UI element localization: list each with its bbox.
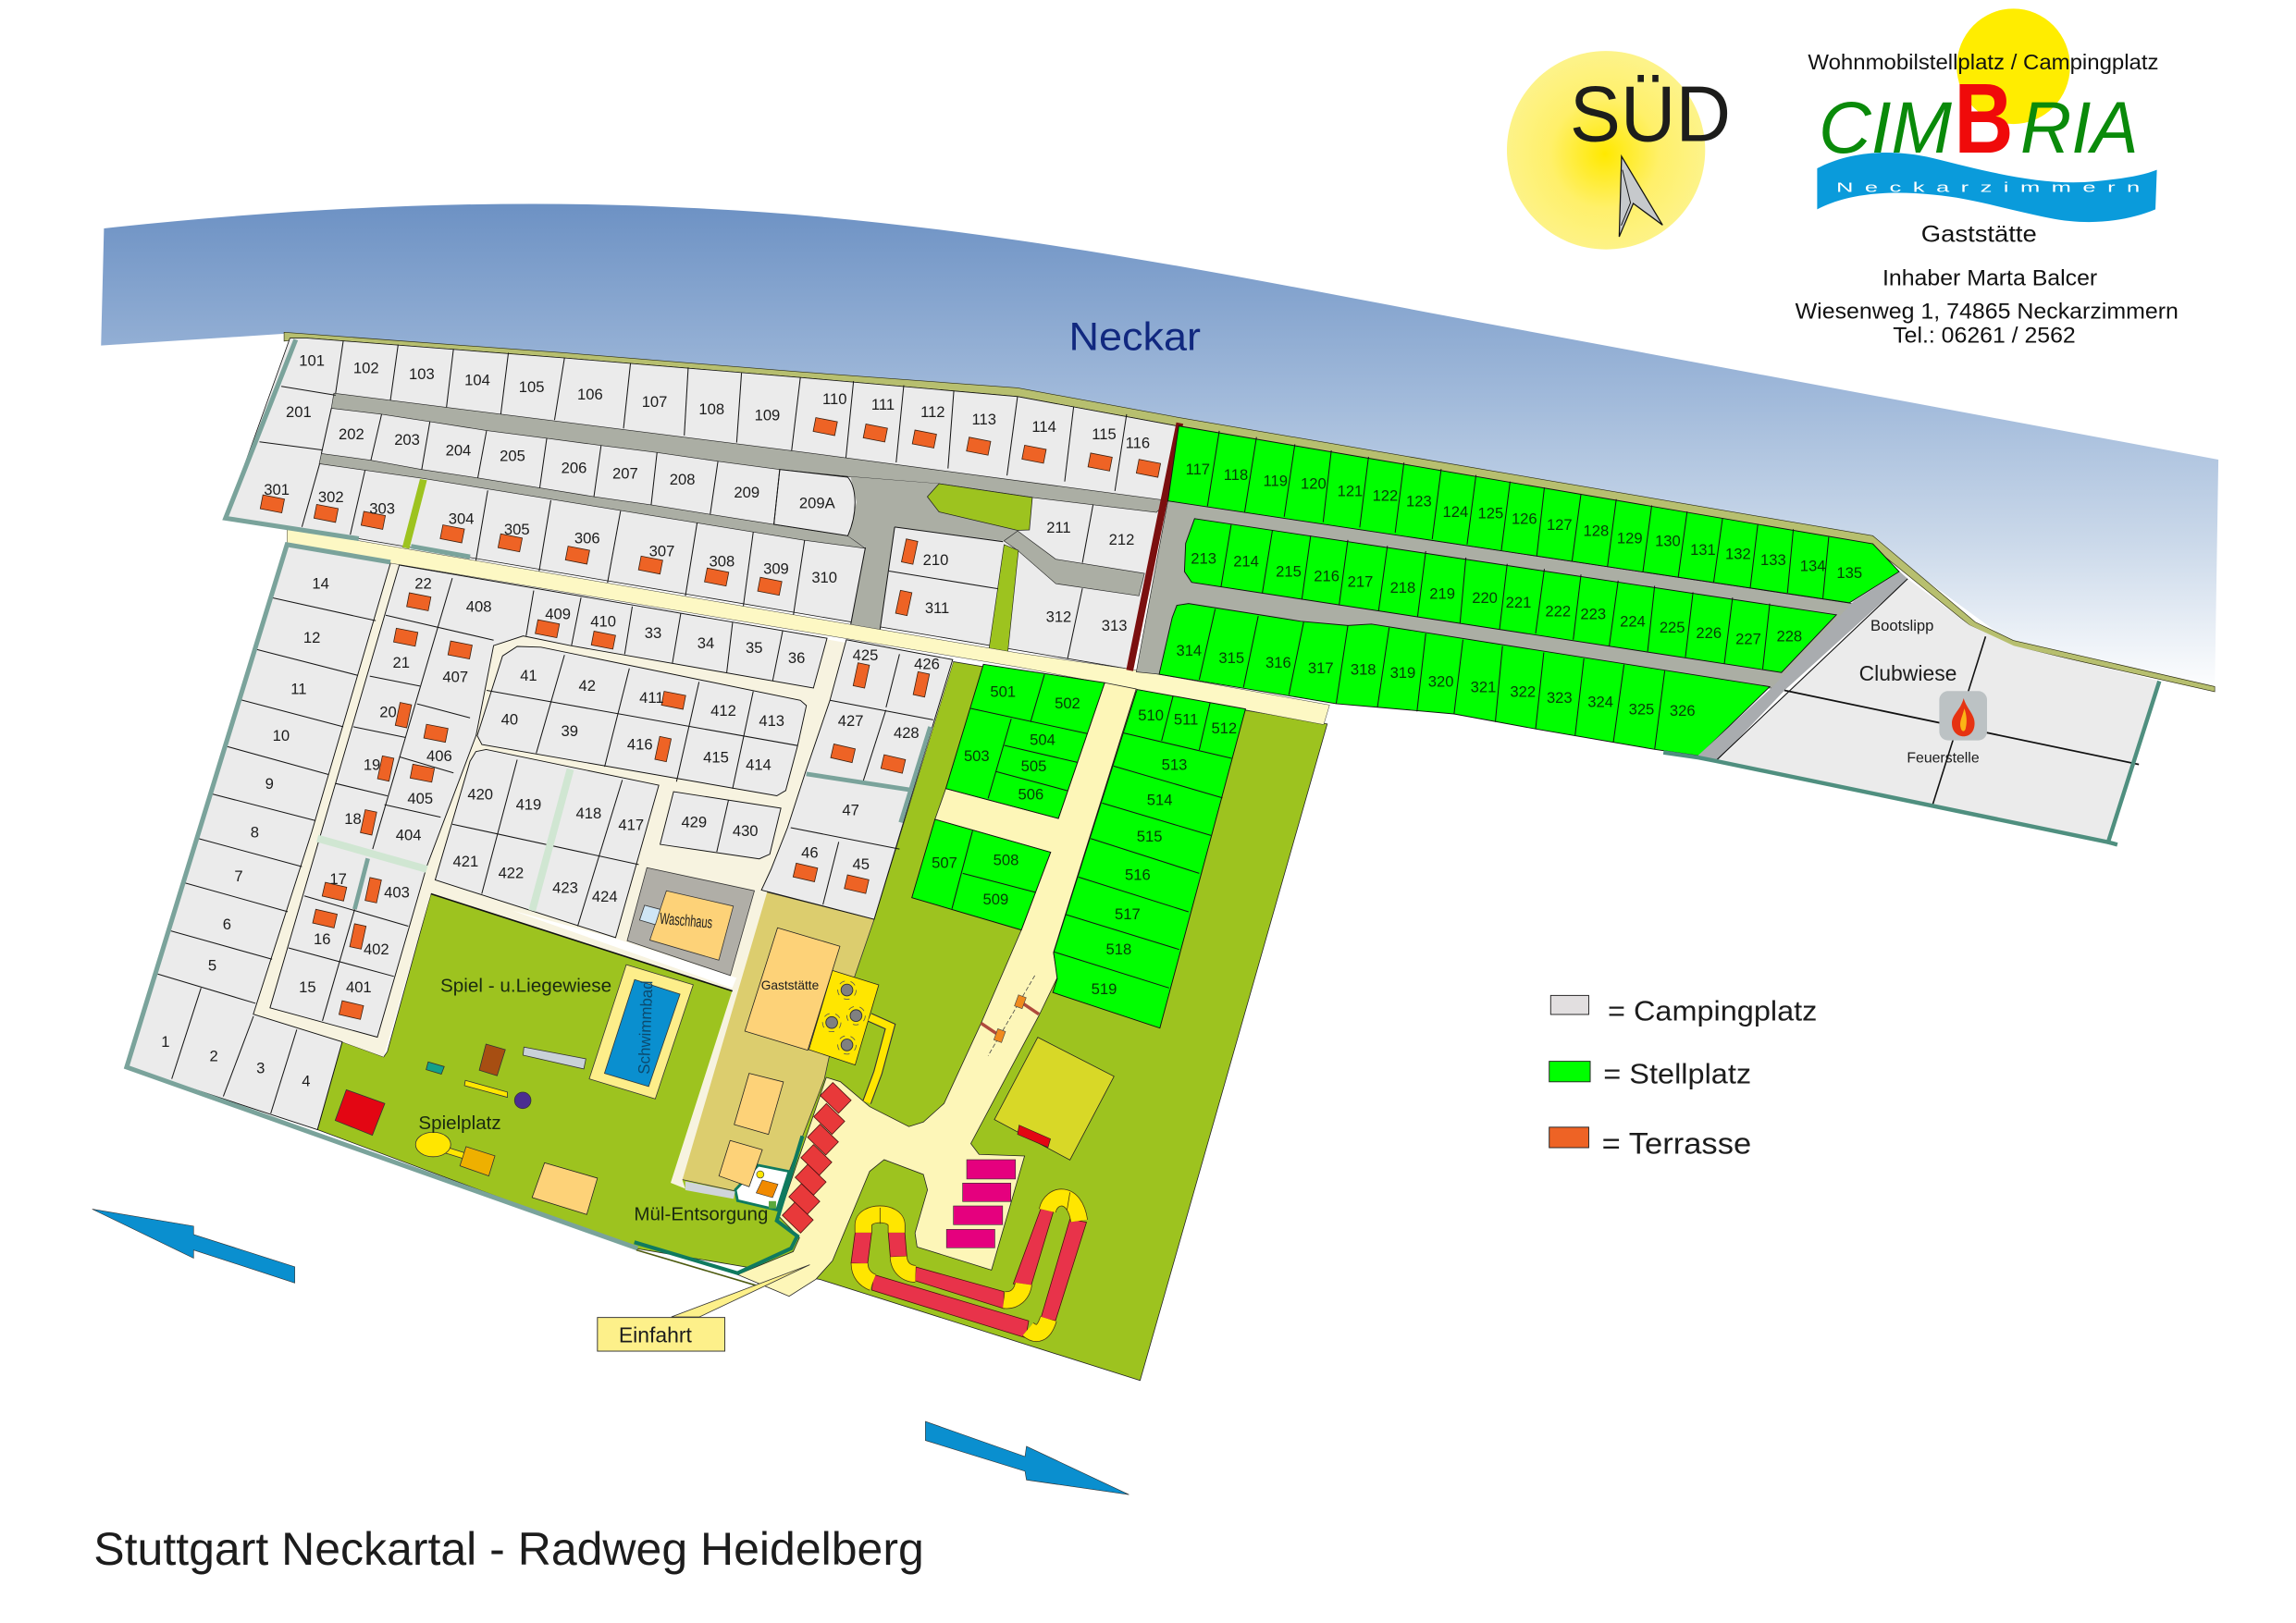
lot numbers camping plots: 5 — [208, 956, 216, 974]
legend: Terrasse — [1549, 1126, 1751, 1160]
lot numbers stellplatz: 120 — [1301, 475, 1327, 493]
lot numbers camping plots: 112 — [920, 403, 945, 421]
lot numbers camping plots: 421 — [453, 853, 478, 870]
lot numbers camping plots: 110 — [822, 390, 846, 408]
grey side road — [1697, 572, 1907, 761]
waste disposal station — [685, 1165, 789, 1210]
legend: Stellplatz — [1549, 1057, 1751, 1089]
green island — [927, 484, 1032, 531]
lot numbers camping plots: 401 — [346, 978, 372, 996]
label Bootslipp: Bootslipp — [1870, 617, 1933, 634]
lot numbers stellplatz: 314 — [1176, 642, 1202, 659]
lot numbers stellplatz: 504 — [1030, 732, 1055, 749]
lot numbers stellplatz: 219 — [1429, 584, 1455, 602]
stellplatz row 213-228 — [1184, 519, 1836, 672]
light green hedge — [317, 839, 426, 869]
label Clubwiese: Clubwiese — [1859, 661, 1957, 685]
lot numbers camping plots: 407 — [442, 669, 468, 686]
label Spiel- und Liegewiese: Spiel - u.Liegewiese — [440, 975, 611, 996]
address block: Gaststätte — [1921, 222, 2037, 248]
lot numbers stellplatz: 126 — [1512, 510, 1537, 528]
lot numbers camping plots: 428 — [894, 724, 920, 742]
lot numbers camping plots: 22 — [414, 574, 432, 592]
lot numbers stellplatz: 318 — [1351, 661, 1376, 679]
lot numbers camping plots: 203 — [394, 431, 420, 449]
legend — [1549, 994, 1817, 1160]
lot numbers stellplatz: 501 — [990, 682, 1016, 700]
lot numbers camping plots: 207 — [612, 465, 638, 483]
lot numbers camping plots: 201 — [286, 403, 312, 421]
lot numbers camping plots: 115 — [1092, 425, 1117, 443]
compass sun SUED — [1507, 51, 1731, 250]
main yellow road — [287, 528, 1329, 725]
dividers row 314-326 — [1199, 609, 1665, 749]
lot numbers camping plots: 21 — [392, 654, 410, 671]
lot numbers stellplatz: 131 — [1690, 541, 1716, 559]
lot numbers stellplatz: 213 — [1191, 549, 1216, 567]
olive green meadow — [317, 661, 1327, 1381]
junction — [848, 476, 1018, 630]
lot numbers camping plots: 307 — [649, 543, 674, 560]
lot numbers stellplatz: 216 — [1314, 567, 1339, 584]
lot numbers camping plots: 106 — [577, 386, 603, 403]
logo Cimbria — [1808, 8, 2159, 222]
lot numbers stellplatz: 122 — [1373, 486, 1398, 504]
lot numbers stellplatz: 215 — [1276, 563, 1302, 581]
stellplatz group 510-519 — [1053, 690, 1245, 1028]
lot numbers stellplatz: 319 — [1390, 664, 1415, 682]
lot numbers camping plots: 116 — [1126, 434, 1150, 451]
yellow terrace — [809, 970, 879, 1065]
lot numbers stellplatz: 514 — [1147, 792, 1173, 809]
callout Einfahrt — [598, 1265, 809, 1351]
lot numbers stellplatz: 135 — [1836, 564, 1862, 582]
stellplatz road — [737, 682, 1136, 1297]
road two — [319, 453, 865, 548]
lot numbers camping plots: 208 — [670, 471, 695, 488]
lot numbers stellplatz: 226 — [1696, 624, 1722, 642]
lot numbers stellplatz: 221 — [1506, 594, 1531, 611]
lot numbers camping plots: 39 — [562, 722, 578, 740]
lot numbers camping plots: 1 — [161, 1033, 169, 1051]
entrance hedge line — [635, 1136, 802, 1273]
lot numbers camping plots: 211 — [1046, 519, 1071, 536]
block: camping plots north — [226, 338, 1178, 669]
lot numbers stellplatz: 228 — [1776, 627, 1802, 645]
lot numbers stellplatz: 509 — [983, 891, 1008, 908]
lot numbers camping plots: 204 — [446, 441, 471, 459]
lot numbers camping plots: 419 — [516, 795, 541, 813]
stellplatz row 314-326 — [1159, 604, 1770, 756]
lot numbers camping plots: 109 — [755, 406, 780, 424]
lot numbers camping plots: 14 — [312, 574, 329, 592]
lot numbers stellplatz: 325 — [1629, 700, 1654, 718]
lot numbers camping plots: 9 — [265, 775, 274, 793]
lot numbers stellplatz: 217 — [1348, 573, 1373, 591]
lot numbers camping plots: 104 — [464, 371, 490, 388]
lot numbers stellplatz: 513 — [1162, 756, 1187, 774]
lot numbers stellplatz: 516 — [1125, 866, 1151, 883]
river bank strip — [284, 332, 2215, 692]
legend: Campingplatz: = Campingplatz — [1608, 994, 1817, 1027]
lot numbers camping plots: 35 — [746, 639, 762, 657]
teal hedge — [354, 858, 368, 909]
grey access roads — [319, 393, 1168, 630]
lot numbers camping plots: 427 — [838, 712, 864, 730]
lot numbers camping plots: 404 — [396, 827, 421, 844]
label SUED: SÜD — [1570, 70, 1731, 158]
lot numbers camping plots: 426 — [914, 655, 940, 672]
plots 425-428, 45-47 — [761, 640, 953, 919]
entry barrier — [981, 976, 1039, 1056]
lot numbers camping plots: 429 — [681, 813, 707, 830]
lot numbers stellplatz: 317 — [1308, 659, 1334, 677]
label Feuerstelle: Feuerstelle — [1907, 751, 1980, 767]
green strip — [988, 545, 1018, 656]
dividers — [487, 655, 797, 789]
lot numbers camping plots: 105 — [519, 378, 544, 396]
lot numbers stellplatz: 123 — [1406, 493, 1432, 510]
dividers plots 1-14 — [157, 597, 376, 1113]
white gap — [512, 911, 736, 988]
lot numbers camping plots: 412 — [710, 702, 736, 719]
lot numbers camping plots: 206 — [562, 459, 586, 476]
green divider strip row 300 — [402, 479, 427, 548]
lot numbers camping plots: 312 — [1046, 609, 1071, 626]
logo wave — [1817, 153, 2157, 222]
lot numbers camping plots: 45 — [853, 855, 870, 873]
lot numbers stellplatz: 502 — [1055, 695, 1080, 712]
lot numbers stellplatz: 323 — [1547, 689, 1573, 707]
lot numbers stellplatz: 130 — [1655, 532, 1681, 549]
lot numbers camping plots: 114 — [1031, 418, 1056, 436]
lot numbers camping plots: 301 — [264, 481, 290, 498]
logo wordmark: CIM — [1819, 86, 1952, 168]
bottom route title: Stuttgart Neckartal - Radweg Heidelberg — [93, 1523, 924, 1575]
teal fence — [1663, 682, 2159, 842]
lot numbers stellplatz: 132 — [1725, 546, 1751, 563]
label Schwimmbad: Schwimmbad — [635, 980, 656, 1075]
label Gaststaette: Gaststätte — [761, 978, 819, 993]
lot numbers camping plots: 36 — [788, 649, 805, 667]
lot numbers camping plots: 33 — [645, 624, 661, 642]
lot numbers stellplatz: 517 — [1115, 905, 1141, 923]
swimming pool — [589, 965, 693, 1099]
address block: Wiesenweg 1, 74865 Neckarzimmern — [1796, 299, 2179, 324]
lot numbers camping plots: 19 — [364, 756, 380, 774]
lot numbers stellplatz: 223 — [1580, 606, 1606, 623]
address block: Tel.: 06261 / 2562 — [1893, 325, 2076, 349]
side branch — [1004, 531, 1144, 596]
lot numbers camping plots: 209A — [799, 494, 836, 511]
lot numbers camping plots: 423 — [552, 879, 578, 897]
lot numbers camping plots: 17 — [329, 870, 347, 888]
lot numbers camping plots: 102 — [353, 360, 379, 377]
lot numbers stellplatz: 324 — [1587, 694, 1613, 711]
lot numbers stellplatz: 321 — [1471, 679, 1496, 696]
Gaststaette building and terrace — [745, 928, 890, 1102]
lot numbers camping plots: 410 — [590, 612, 616, 630]
camping plots 1-14 — [127, 546, 390, 1130]
grey road area east — [1136, 500, 1861, 688]
lot numbers camping plots: 20 — [379, 704, 397, 721]
lot numbers stellplatz: 227 — [1735, 630, 1761, 647]
lot numbers stellplatz: 224 — [1620, 612, 1646, 630]
river label: Neckar — [1069, 314, 1201, 359]
lot numbers stellplatz: 505 — [1021, 757, 1046, 775]
small buildings on terrain — [532, 1074, 784, 1214]
lot numbers camping plots: 403 — [384, 883, 410, 901]
lot numbers camping plots: 304 — [449, 510, 474, 528]
lot numbers camping plots: 8 — [251, 823, 259, 841]
playground objects — [335, 1044, 586, 1176]
teal hedges — [807, 774, 909, 790]
lot numbers stellplatz: 503 — [964, 747, 990, 765]
legend: Stellplatz: = Stellplatz — [1603, 1057, 1751, 1089]
lot numbers stellplatz: 218 — [1390, 579, 1415, 596]
lot numbers camping plots: 416 — [627, 735, 653, 753]
terraces — [260, 418, 1161, 1019]
lot numbers stellplatz: 506 — [1018, 785, 1043, 803]
lot numbers camping plots: 210 — [923, 551, 948, 569]
lot numbers stellplatz: 125 — [1478, 504, 1503, 522]
dividers — [452, 760, 638, 927]
lot numbers camping plots: 310 — [811, 569, 837, 586]
label Waschhaus: Waschhaus — [659, 909, 713, 932]
lot numbers camping plots: 409 — [545, 606, 571, 623]
logo wordmark: B — [1955, 63, 2013, 174]
lot numbers stellplatz: 508 — [994, 852, 1018, 869]
arrow: towards west — [93, 1209, 295, 1283]
lot numbers camping plots: 101 — [299, 352, 325, 370]
lot numbers camping plots: 406 — [426, 747, 452, 765]
lot numbers camping plots: 113 — [971, 411, 996, 428]
lot numbers stellplatz: 119 — [1263, 473, 1288, 490]
beige paths base — [253, 562, 953, 1188]
red and yellow track — [851, 1192, 1087, 1338]
olive-yellow hall — [994, 1038, 1114, 1160]
lot numbers camping plots: 205 — [500, 448, 525, 465]
gastro terrain tan area — [679, 891, 874, 1192]
lot numbers camping plots: 107 — [642, 393, 667, 411]
lot numbers camping plots: 6 — [223, 916, 231, 933]
lot numbers camping plots: 408 — [466, 598, 491, 616]
lot numbers camping plots: 414 — [746, 756, 772, 774]
plots 417-424 — [435, 749, 659, 938]
lot numbers camping plots: 420 — [467, 785, 493, 803]
stellplatz row 117-135 — [1168, 426, 1899, 603]
address block: Inhaber Marta Balcer — [1882, 266, 2097, 290]
lot numbers camping plots: 103 — [409, 365, 435, 383]
meadow dividers — [1784, 691, 2139, 765]
path to road — [867, 1017, 890, 1102]
lot numbers stellplatz: 118 — [1224, 466, 1248, 484]
black line meadow edge — [431, 894, 733, 991]
lot numbers camping plots: 212 — [1109, 531, 1134, 548]
lot numbers stellplatz: 133 — [1760, 551, 1786, 569]
lot numbers stellplatz: 322 — [1510, 682, 1536, 700]
lot numbers stellplatz: 117 — [1186, 461, 1210, 478]
lot numbers stellplatz: 220 — [1472, 589, 1498, 607]
lot numbers camping plots: 411 — [639, 689, 664, 707]
stellplatz group 501-506 — [945, 664, 1105, 818]
light green hedge — [532, 769, 571, 911]
lot numbers camping plots: 424 — [592, 888, 618, 905]
lot numbers stellplatz: 507 — [932, 855, 957, 872]
lot numbers camping plots: 42 — [579, 677, 596, 695]
lot numbers camping plots: 16 — [314, 930, 330, 948]
lot numbers camping plots: 422 — [499, 865, 524, 882]
label Spielplatz: Spielplatz — [418, 1113, 501, 1134]
lot numbers camping plots: 4 — [302, 1073, 310, 1090]
lot numbers camping plots: 108 — [698, 400, 724, 418]
lot numbers camping plots: 305 — [504, 521, 530, 538]
logo wordmark: RIA — [2020, 86, 2139, 168]
dividers — [791, 654, 933, 904]
lot numbers camping plots: 309 — [763, 560, 789, 578]
lot numbers camping plots: 34 — [697, 634, 714, 652]
icon: compass arrow — [1619, 156, 1662, 237]
arrow: towards east — [925, 1421, 1129, 1494]
lot numbers stellplatz: 515 — [1137, 828, 1162, 845]
lot numbers camping plots: 418 — [575, 805, 601, 822]
address block — [1796, 222, 2179, 349]
lot numbers camping plots: 47 — [842, 802, 859, 819]
lot numbers camping plots: 3 — [256, 1059, 265, 1076]
lot numbers stellplatz: 225 — [1660, 619, 1685, 636]
icon: fire place — [1939, 691, 1987, 741]
Clubwiese area — [1663, 572, 2160, 844]
lot numbers camping plots: 308 — [710, 553, 734, 571]
lot numbers camping plots: 12 — [303, 629, 320, 646]
lot numbers camping plots: 402 — [364, 941, 389, 958]
stellplatz group 507-509 — [912, 819, 1051, 930]
lot numbers camping plots: 313 — [1102, 617, 1127, 634]
Waschhaus — [627, 867, 755, 976]
dark red fence — [1129, 423, 1179, 670]
dividers — [289, 578, 783, 1021]
lot numbers camping plots: 40 — [501, 711, 518, 729]
callout Einfahrt: Einfahrt — [619, 1323, 692, 1347]
logo strapline: Wohnmobilstellplatz / Campingplatz — [1808, 50, 2159, 74]
lot numbers stellplatz: 316 — [1265, 654, 1291, 671]
lot numbers camping plots: 10 — [273, 727, 290, 744]
lot numbers stellplatz: 128 — [1584, 522, 1609, 539]
lot numbers camping plots: 111 — [871, 396, 895, 413]
lot numbers camping plots: 11 — [290, 680, 307, 697]
magenta parking — [946, 1160, 1016, 1248]
lot numbers stellplatz — [932, 461, 1862, 998]
chairs around tables — [822, 981, 865, 1054]
lot numbers camping plots: 202 — [339, 425, 364, 443]
lot numbers camping plots: 413 — [759, 712, 784, 730]
lot numbers stellplatz: 121 — [1338, 483, 1363, 500]
lot numbers camping plots: 15 — [299, 978, 316, 996]
lot numbers stellplatz: 129 — [1617, 529, 1643, 547]
lot numbers camping plots: 425 — [853, 646, 878, 664]
lot numbers camping plots — [161, 352, 1150, 1090]
lot numbers stellplatz: 214 — [1233, 553, 1259, 571]
logo wordmark — [1819, 63, 2139, 174]
lot numbers camping plots: 7 — [234, 867, 243, 885]
dividers row 117-135 — [1207, 431, 1829, 598]
lot numbers stellplatz: 124 — [1443, 503, 1468, 521]
lot numbers stellplatz: 519 — [1092, 980, 1117, 998]
red parking spaces — [783, 1083, 851, 1233]
camping plots 15-22 and 401-410, 33-36 — [270, 565, 827, 1038]
lot numbers stellplatz: 134 — [1800, 557, 1825, 574]
lot numbers camping plots: 311 — [925, 599, 949, 617]
road one — [331, 393, 1168, 512]
lot numbers camping plots: 18 — [344, 810, 362, 828]
lot numbers camping plots: 302 — [318, 488, 344, 506]
lot numbers stellplatz: 510 — [1138, 707, 1164, 724]
lot dividers north block — [259, 341, 1127, 658]
lot numbers stellplatz: 326 — [1670, 702, 1696, 719]
lot numbers camping plots: 41 — [520, 667, 537, 684]
lot numbers stellplatz: 511 — [1174, 711, 1198, 729]
legend: Terrasse: = Terrasse — [1602, 1126, 1751, 1160]
lot numbers camping plots: 405 — [407, 790, 433, 807]
lot numbers camping plots: 46 — [801, 844, 819, 862]
lot numbers stellplatz: 512 — [1211, 719, 1237, 737]
site boundary teal fence — [127, 339, 637, 1248]
lot numbers stellplatz: 315 — [1218, 649, 1244, 667]
lot numbers stellplatz: 222 — [1545, 602, 1571, 620]
lot numbers camping plots: 303 — [369, 500, 395, 518]
209A rounded lot end — [774, 470, 855, 535]
lot numbers camping plots: 306 — [574, 529, 600, 547]
lot numbers stellplatz: 320 — [1428, 672, 1453, 690]
lot numbers camping plots: 430 — [733, 822, 759, 840]
dividers row 213-228 — [1221, 524, 1770, 669]
lot numbers camping plots: 209 — [734, 484, 759, 501]
lot numbers stellplatz: 127 — [1547, 516, 1573, 534]
lot numbers camping plots: 2 — [209, 1048, 218, 1065]
river Neckar — [101, 203, 2218, 691]
logo place name: Neckarzimmern — [1836, 179, 2140, 195]
plots 429-430 — [660, 792, 781, 859]
lot numbers stellplatz: 518 — [1105, 941, 1131, 958]
label Muell-Entsorgung: Mül-Entsorgung — [634, 1203, 768, 1224]
tables — [826, 984, 862, 1051]
lot numbers camping plots: 415 — [703, 749, 729, 767]
ring plots 39-42, 411-416 — [477, 646, 807, 795]
lot numbers camping plots: 417 — [618, 817, 644, 834]
